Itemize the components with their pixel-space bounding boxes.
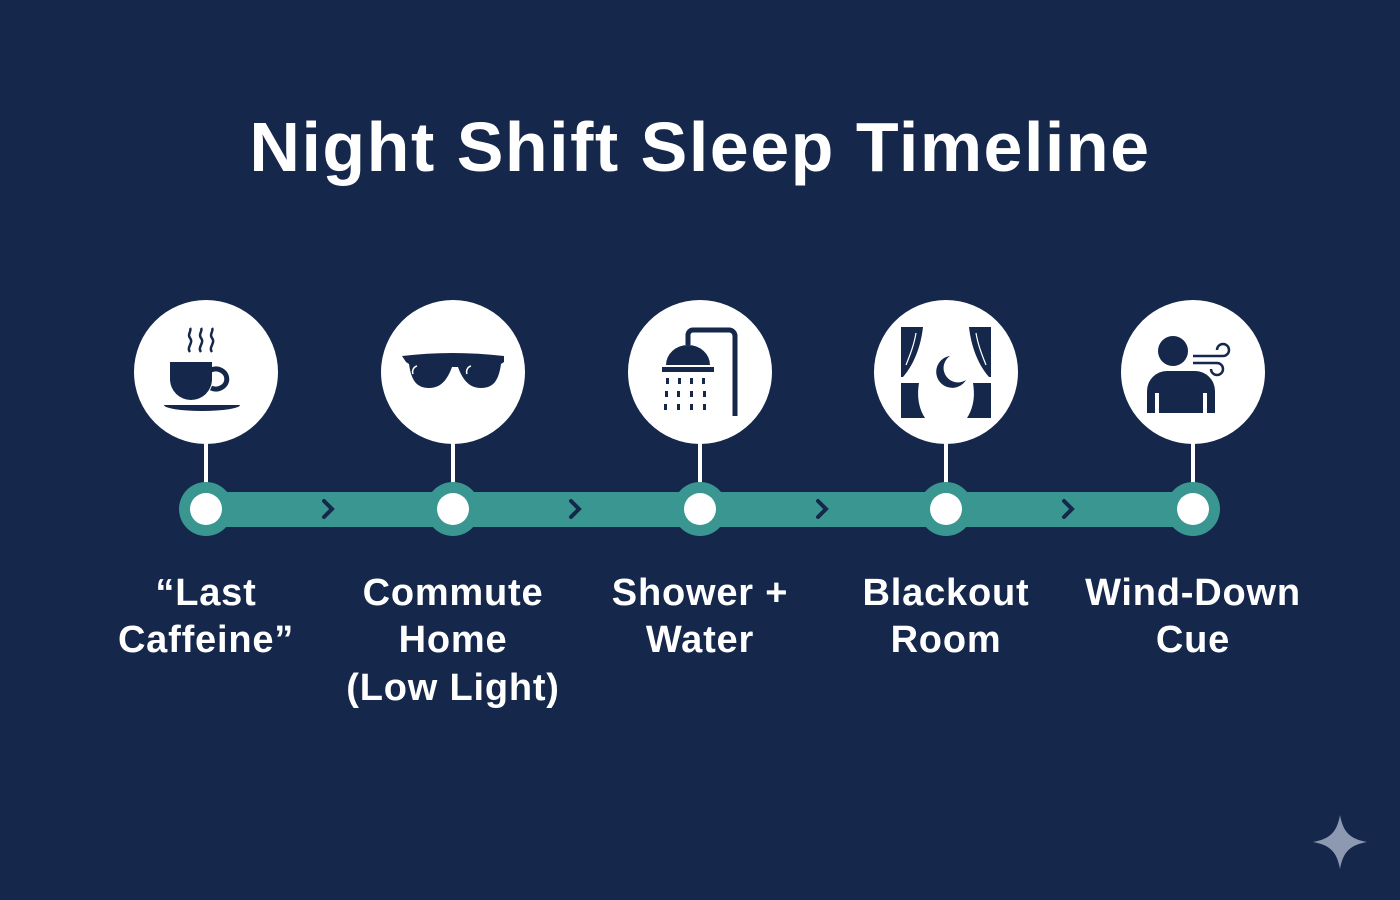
icon: blackout curtains xyxy=(874,300,1018,444)
label: commute: Commute xyxy=(363,572,543,614)
icon: shower xyxy=(628,300,772,444)
stems xyxy=(206,440,1193,490)
label: wind-down: Cue xyxy=(1156,619,1230,661)
timeline bar xyxy=(179,440,1220,536)
label: last caffeine: “Last xyxy=(155,572,257,614)
icon: sunglasses xyxy=(381,300,525,444)
label: commute: (Low Light) xyxy=(346,667,560,709)
label: wind-down: Wind-Down xyxy=(1085,572,1301,614)
icon: person breathing xyxy=(1121,300,1265,444)
label: last caffeine: Caffeine” xyxy=(118,619,294,661)
label: blackout: Blackout xyxy=(863,572,1029,614)
arrows xyxy=(324,501,1072,517)
label: blackout: Room xyxy=(891,619,1001,661)
icon: sparkle xyxy=(1313,815,1367,869)
title: Night Shift Sleep Timeline xyxy=(249,108,1151,186)
labels xyxy=(118,572,1301,709)
nodes xyxy=(179,482,1220,536)
label: commute: Home xyxy=(399,619,507,661)
label: shower: Shower + xyxy=(612,572,788,614)
label: shower: Water xyxy=(646,619,754,661)
icon: coffee cup xyxy=(134,300,278,444)
